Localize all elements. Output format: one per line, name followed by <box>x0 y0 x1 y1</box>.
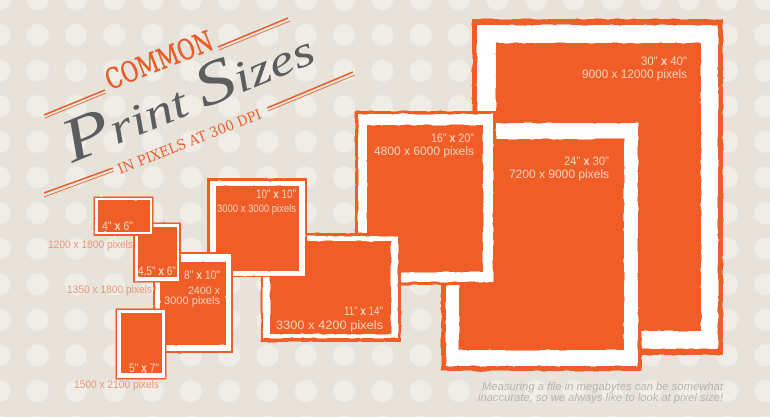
label: 4.5" x 6" <box>138 266 176 278</box>
subheading: in pixels at 300 dpi: IN PIXELS AT 300 DPI <box>116 107 264 178</box>
frame shape <box>153 252 233 353</box>
pixels line one: 2400 x <box>188 285 220 297</box>
caption: 1200 x 1800 pixels: 1200 x 1800 pixels <box>48 239 133 251</box>
heading: print sizes: Print Sizes <box>50 11 323 176</box>
footnote line one: Measuring a file in megabytes can be somewhat <box>482 381 724 393</box>
caption: 1500 x 2100 pixels: 1500 x 2100 pixels <box>74 379 159 391</box>
pixels: 4800 x 6000 pixels <box>374 146 474 158</box>
frame: 24 x 30 <box>441 120 642 371</box>
label: 10" x 10" <box>256 189 296 201</box>
frame: 11 x 14 <box>261 233 401 342</box>
title rules <box>44 18 355 197</box>
frame: 8 x 10 <box>153 252 233 353</box>
pixels: 7200 x 9000 pixels <box>509 169 609 181</box>
pixels: 3000 x 3000 pixels <box>217 203 296 215</box>
frame shape <box>116 308 166 380</box>
footnote line two: inaccurate, so we always like to look at pixel size! <box>478 392 723 404</box>
frame: 4 x 6 <box>94 196 154 236</box>
heading: common: COMMON <box>100 24 218 97</box>
frame shape <box>133 222 181 282</box>
pixels: 3300 x 4200 pixels <box>276 320 383 332</box>
frame: 16 x 20 <box>355 111 496 285</box>
frame: 10 x 10 <box>207 178 307 277</box>
label: 4" x 6" <box>102 221 133 233</box>
frame shape <box>441 120 642 371</box>
frame shape <box>207 178 307 277</box>
frame: 5 x 7 <box>116 308 166 380</box>
label: 24" x 30" <box>564 156 609 168</box>
frame shape <box>355 111 496 285</box>
footnote <box>478 381 724 404</box>
title block <box>44 11 355 197</box>
label: 11" x 14" <box>344 306 383 318</box>
frame shape <box>261 233 401 342</box>
label: 16" x 20" <box>431 133 474 145</box>
caption: 1350 x 1800 pixels: 1350 x 1800 pixels <box>67 284 152 296</box>
label: 30" x 40" <box>641 56 687 68</box>
label: 5" x 7" <box>129 363 159 375</box>
frame shape <box>94 196 154 236</box>
frame shape <box>472 19 723 355</box>
pixels line two: 3000 pixels <box>164 295 220 307</box>
frame: 30 x 40 <box>472 19 723 355</box>
label: 8" x 10" <box>184 270 220 282</box>
pixels: 9000 x 12000 pixels <box>582 69 687 81</box>
frame: 4.5 x 6 <box>133 222 181 282</box>
